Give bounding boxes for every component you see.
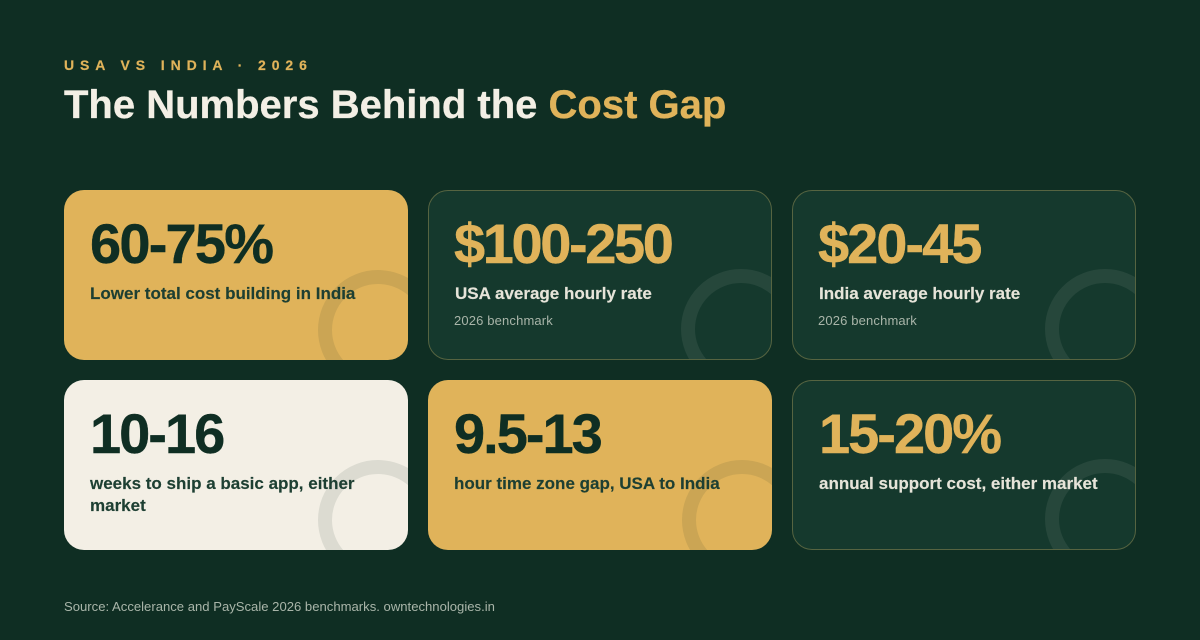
stat label: USA average hourly rate bbox=[455, 284, 652, 303]
stat label: weeks to ship a basic app, either market bbox=[90, 474, 355, 515]
stat number: 9.5-13 bbox=[454, 402, 601, 465]
eyebrow: USA VS INDIA · 2026 bbox=[64, 57, 313, 73]
stat note: 2026 benchmark bbox=[454, 313, 553, 328]
stat number: $100-250 bbox=[454, 212, 671, 275]
stat label: Lower total cost building in India bbox=[90, 284, 355, 303]
stat number: 60-75% bbox=[90, 212, 272, 275]
stat label: annual support cost, either market bbox=[819, 474, 1098, 493]
stat number: $20-45 bbox=[818, 212, 980, 275]
stat label: India average hourly rate bbox=[819, 284, 1020, 303]
panel: 60-75% lower total cost bbox=[64, 190, 408, 360]
stat number: 15-20% bbox=[819, 402, 1000, 465]
title: The Numbers Behind the Cost Gap bbox=[64, 83, 726, 127]
panel: annual support cost bbox=[792, 380, 1136, 550]
panel: weeks to ship bbox=[64, 380, 408, 550]
stat number: 10-16 bbox=[90, 402, 223, 465]
stat label: hour time zone gap, USA to India bbox=[454, 474, 720, 493]
panel: India hourly rate bbox=[792, 190, 1136, 360]
panel: time zone gap bbox=[428, 380, 772, 550]
stat note: 2026 benchmark bbox=[818, 313, 917, 328]
source note: Source: Accelerance and PayScale 2026 benchmarks. owntechnologies.in bbox=[64, 599, 495, 614]
panel: USA hourly rate bbox=[428, 190, 772, 360]
